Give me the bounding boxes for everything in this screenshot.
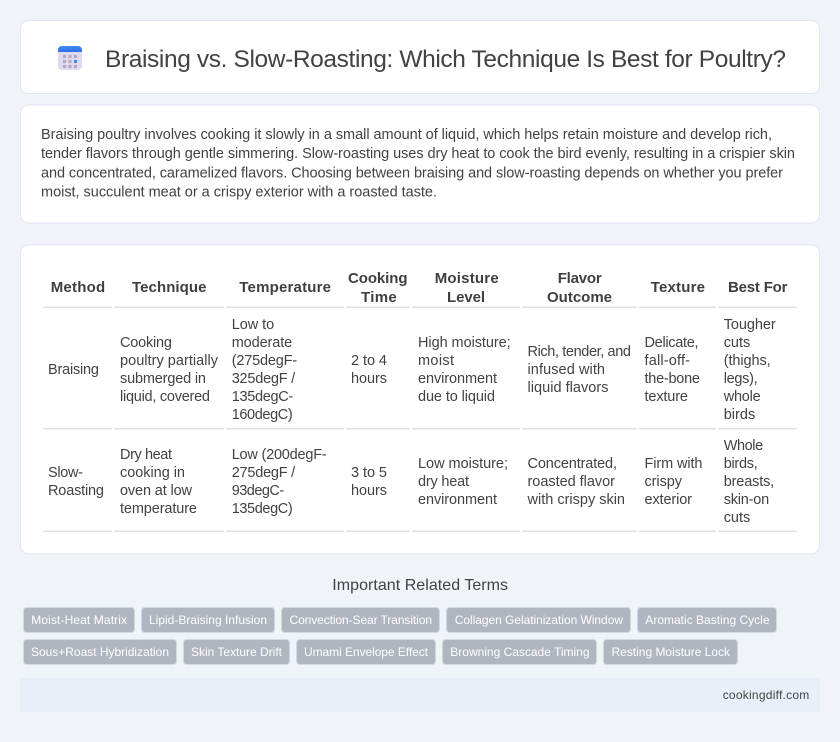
table row: braising: liquid flavors bbox=[528, 380, 608, 396]
related terms heading: Important Related Terms bbox=[332, 577, 508, 594]
table row: slow-roasting: Whole bbox=[724, 438, 763, 454]
table header row: Best For bbox=[728, 279, 788, 296]
intro paragraph: moist, succulent meat or a crispy exterior with a roasted taste. bbox=[41, 184, 437, 200]
table row: braising: cuts bbox=[724, 335, 750, 351]
table row: braising bbox=[48, 317, 776, 423]
table header row: Technique bbox=[132, 279, 206, 296]
term tags: Umami Envelope Effect bbox=[304, 645, 429, 659]
intro paragraph: tender flavors through gentle simmering. Slow-roasting uses dry heat to cook the bird evenly, resulting in a crispier skin bbox=[41, 146, 795, 162]
table row: slow-roasting: oven at low bbox=[120, 483, 193, 499]
table row: slow-roasting: with crispy skin bbox=[526, 492, 625, 508]
table row: braising: fall-off- bbox=[644, 353, 690, 369]
panel: title header bbox=[20, 20, 820, 94]
panel: introduction bbox=[20, 105, 820, 223]
table header row bbox=[51, 270, 788, 306]
table row: slow-roasting: cuts bbox=[724, 510, 750, 526]
table row: slow-roasting: 275degF / bbox=[232, 465, 296, 481]
table header row: Moisture bbox=[435, 270, 499, 287]
table row: slow-roasting: Roasting bbox=[48, 483, 104, 499]
table row: braising: Delicate, bbox=[644, 335, 698, 351]
table row: braising: hours bbox=[351, 371, 387, 387]
table row: slow-roasting: 93degC- bbox=[232, 483, 284, 499]
term tags bbox=[24, 608, 776, 664]
table header row: Method bbox=[51, 279, 105, 296]
table row: slow-roasting: crispy bbox=[644, 474, 683, 490]
table row: braising: submerged in bbox=[120, 371, 206, 387]
table row: slow-roasting: Low (200degF- bbox=[232, 447, 327, 463]
table row: slow-roasting bbox=[48, 438, 774, 526]
term tags: Lipid-Braising Infusion bbox=[149, 613, 267, 627]
table row: braising: 135degC- bbox=[232, 389, 293, 405]
table row: braising: due to liquid bbox=[418, 389, 495, 405]
title: Braising vs. Slow-Roasting: Which Technique Is Best for Poultry? bbox=[105, 46, 786, 73]
table row: braising: birds bbox=[724, 407, 755, 423]
table row: braising: Cooking bbox=[120, 335, 172, 351]
table row: slow-roasting: 3 to 5 bbox=[351, 465, 387, 481]
table row: slow-roasting: Low moisture; bbox=[418, 456, 508, 472]
table row: braising: Rich, tender, and bbox=[528, 344, 631, 360]
table row: slow-roasting: breasts, bbox=[724, 474, 774, 490]
table header row: Time bbox=[361, 289, 397, 306]
table row: braising: infused with bbox=[528, 362, 605, 378]
term tags: Collagen Gelatinization Window bbox=[455, 613, 623, 627]
table row: slow-roasting: roasted flavor bbox=[528, 474, 615, 490]
table row: slow-roasting: birds, bbox=[724, 456, 758, 472]
table row: slow-roasting: environment bbox=[418, 492, 497, 508]
table header row: Flavor bbox=[558, 270, 602, 287]
table row: braising: moderate bbox=[232, 335, 292, 351]
table row: braising: moist bbox=[418, 353, 454, 369]
panel: comparison table bbox=[20, 245, 820, 554]
table row: braising: (thighs, bbox=[724, 353, 771, 369]
intro paragraph: and concentrated, caramelized flavors. Choosing between braising and slow-roasting depends on whether you prefer bbox=[41, 166, 783, 182]
table row: braising: texture bbox=[644, 389, 688, 405]
table row: braising: poultry partially bbox=[120, 353, 219, 369]
table row: slow-roasting: cooking in bbox=[120, 465, 185, 481]
icon: calendar bbox=[58, 46, 82, 70]
table row: braising: High moisture; bbox=[418, 335, 511, 351]
table row: slow-roasting: Concentrated, bbox=[528, 456, 617, 472]
table row: braising: the-bone bbox=[644, 371, 700, 387]
term tags: Resting Moisture Lock bbox=[612, 645, 731, 659]
table header row: Temperature bbox=[239, 279, 331, 296]
table row: braising: (275degF- bbox=[232, 353, 297, 369]
table header row: Texture bbox=[651, 279, 705, 296]
term tags: Aromatic Basting Cycle bbox=[645, 613, 770, 627]
table header row: Level bbox=[447, 289, 485, 306]
table row: slow-roasting: skin-on bbox=[724, 492, 769, 508]
table row: braising: Tougher bbox=[724, 317, 776, 333]
table row: braising: Low to bbox=[232, 317, 274, 333]
term tags: Sous+Roast Hybridization bbox=[31, 645, 169, 659]
intro paragraph bbox=[41, 127, 795, 200]
term tags: Browning Cascade Timing bbox=[450, 645, 590, 659]
term tags: Convection-Sear Transition bbox=[290, 613, 432, 627]
table row: slow-roasting: dry heat bbox=[418, 474, 469, 490]
footer bar bbox=[20, 678, 820, 712]
table row: braising: 160degC) bbox=[232, 407, 293, 423]
term tags: Moist-Heat Matrix bbox=[31, 613, 127, 627]
table row: braising: environment bbox=[418, 371, 497, 387]
table row: slow-roasting: Firm with bbox=[644, 456, 702, 472]
table row: slow-roasting: Dry heat bbox=[120, 447, 172, 463]
table row: slow-roasting: Slow- bbox=[48, 465, 83, 481]
panel: related terms bbox=[24, 577, 776, 664]
table row: slow-roasting: hours bbox=[351, 483, 387, 499]
table row: braising: 2 to 4 bbox=[351, 353, 387, 369]
table row: braising: liquid, covered bbox=[120, 389, 210, 405]
table row: slow-roasting: exterior bbox=[644, 492, 692, 508]
intro paragraph: Braising poultry involves cooking it slowly in a small amount of liquid, which helps retain moisture and develop rich, bbox=[41, 127, 772, 143]
table row: braising: Braising bbox=[48, 362, 99, 378]
table row: braising: whole bbox=[723, 389, 761, 405]
table header row: Outcome bbox=[547, 289, 612, 306]
table row: slow-roasting: temperature bbox=[120, 501, 197, 517]
table row: braising: legs), bbox=[724, 371, 758, 387]
table row: braising: 325degF / bbox=[232, 371, 296, 387]
table header row: Cooking bbox=[348, 270, 408, 287]
table row: slow-roasting: 135degC) bbox=[232, 501, 293, 517]
footer bar: cookingdiff.com bbox=[723, 688, 809, 702]
term tags: Skin Texture Drift bbox=[191, 645, 283, 659]
